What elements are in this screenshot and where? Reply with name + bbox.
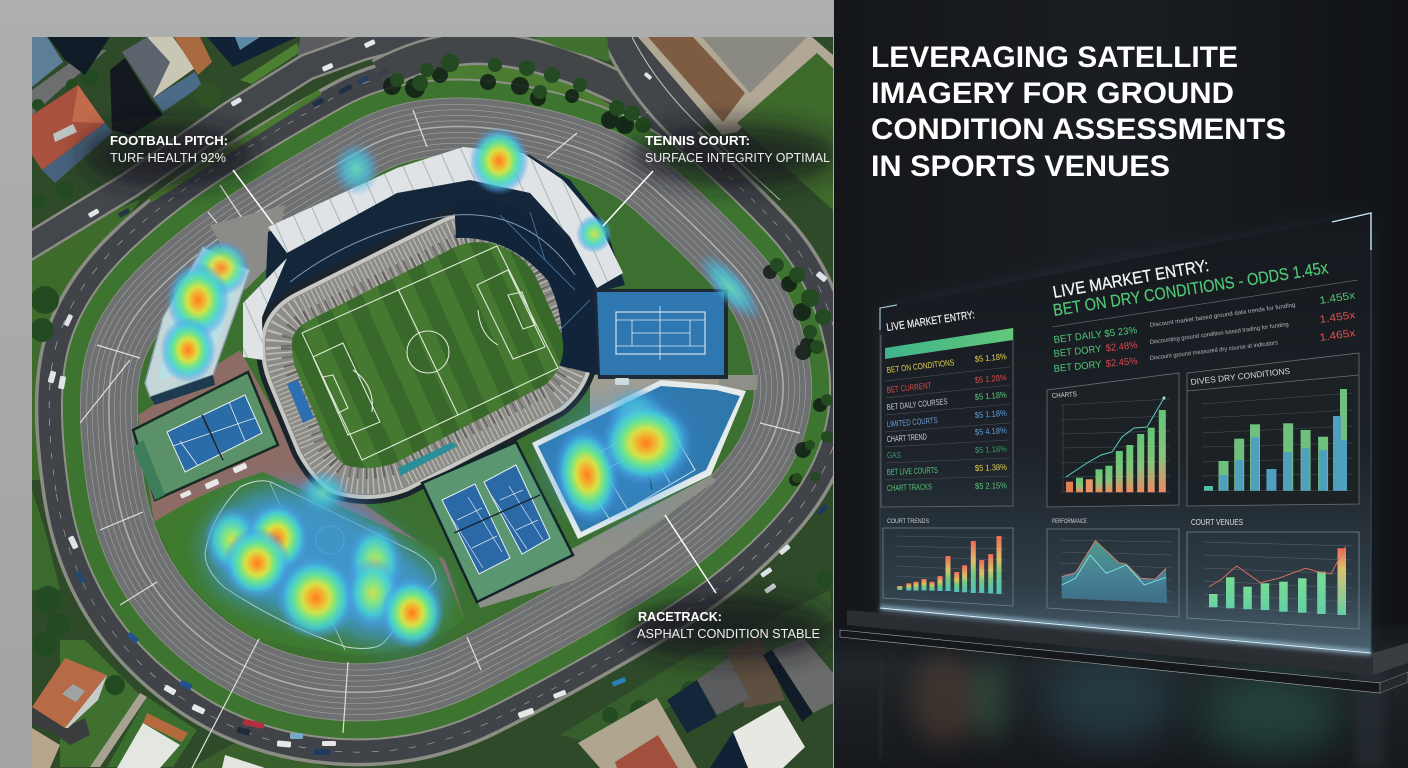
panel: live market entry headline: BET DORY bbox=[1053, 344, 1102, 360]
panel: market list: CHART TREND bbox=[886, 431, 927, 444]
panel: live market entry headline: 1.455x bbox=[1319, 289, 1357, 307]
heat map hot spots bbox=[160, 127, 771, 649]
panel: market list: $5 1.18% bbox=[975, 444, 1007, 455]
heat map: lower-left field wash bbox=[205, 488, 442, 643]
panel: market list: $5 1.18% bbox=[974, 389, 1007, 402]
center green double tennis courts bbox=[422, 442, 573, 602]
display stand base bbox=[840, 610, 1408, 693]
bar chart: charts bbox=[1047, 373, 1179, 507]
racetrack lanes bbox=[109, 126, 783, 692]
panel: market list: BET LIVE COURTS bbox=[887, 465, 938, 477]
panel: live market entry headline bbox=[1051, 256, 1358, 375]
vehicles bbox=[48, 39, 829, 755]
building with roof heat map bbox=[145, 247, 250, 405]
right page background bbox=[834, 0, 1408, 768]
panel: live market entry headline: LIVE MARKET ENTRY: bbox=[1051, 256, 1210, 302]
panel: market list: LIMITED COURTS bbox=[886, 415, 938, 429]
building: red roof bbox=[32, 85, 113, 183]
panel: market list: GAS bbox=[887, 450, 901, 460]
top-right dirt yard bbox=[638, 37, 833, 210]
panel: market list: BET DAILY COURSES bbox=[886, 396, 948, 412]
callout: football pitch bbox=[110, 133, 273, 224]
callout: racetrack bbox=[637, 515, 820, 641]
title: LEVERAGING SATELLITE bbox=[871, 41, 1238, 74]
title bbox=[871, 41, 1286, 183]
lower-right pool-shaped court bbox=[532, 380, 746, 539]
panel: market list: BET CURRENT bbox=[886, 380, 932, 395]
panel: market list: $5 2.15% bbox=[975, 480, 1007, 491]
callout: tennis court bbox=[603, 133, 830, 226]
panel: market list: BET ON CONDITIONS bbox=[886, 357, 955, 375]
panel: live market entry headline: BET DORY bbox=[1053, 359, 1102, 375]
callout: tennis court: TENNIS COURT: bbox=[645, 133, 750, 148]
panel: live market entry headline: BET DAILY $5 23% bbox=[1053, 325, 1138, 346]
surrounding ring road bbox=[109, 126, 783, 692]
panel: glass dashboard bbox=[880, 213, 1371, 653]
heat map: lower-right court wash bbox=[531, 381, 694, 530]
upper-right blue tennis court bbox=[594, 289, 728, 379]
title: IN SPORTS VENUES bbox=[871, 150, 1170, 183]
panel: market list: $5 1.18% bbox=[974, 408, 1007, 420]
callout: racetrack: ASPHALT CONDITION STABLE bbox=[637, 626, 820, 641]
bar and line chart: court venues: COURT VENUES bbox=[1191, 518, 1243, 527]
panel: live market entry headline: $2.48% bbox=[1105, 340, 1138, 354]
outside lawns bbox=[32, 37, 833, 768]
buildings: bottom-left bbox=[32, 658, 265, 768]
bar chart: dry conditions: DIVES DRY CONDITIONS bbox=[1190, 366, 1291, 387]
grass ring around track bbox=[109, 126, 783, 692]
title: IMAGERY FOR GROUND bbox=[871, 77, 1234, 110]
bar chart: court trends bbox=[883, 518, 1013, 606]
panel: market list: $5 4.18% bbox=[975, 425, 1007, 437]
bar chart: charts: CHARTS bbox=[1052, 391, 1077, 400]
panel: market list: LIVE MARKET ENTRY: bbox=[886, 309, 975, 334]
bar chart: dry conditions bbox=[1187, 353, 1359, 506]
football pitch bbox=[292, 242, 563, 468]
upper roads bbox=[20, 30, 780, 252]
left page background bbox=[0, 0, 834, 768]
area chart: performance bbox=[1047, 518, 1179, 617]
panel: live market entry headline: 1.465x bbox=[1319, 327, 1357, 344]
label scrim: football pitch bbox=[83, 123, 253, 187]
panel: live market entry headline: Discount market based ground data trends for funding bbox=[1149, 303, 1296, 329]
building: grey and cream roof bbox=[122, 37, 221, 112]
infield plaza bbox=[138, 350, 465, 620]
buildings: bottom-right bbox=[578, 637, 833, 768]
lower-left grass field bbox=[154, 472, 465, 655]
floor and reflections bbox=[834, 625, 1408, 768]
panel: aerial satellite view of sports venue bbox=[20, 30, 840, 768]
panel: market list: $5 1.18% bbox=[974, 351, 1007, 364]
panel: market list: $5 1.38% bbox=[975, 462, 1007, 473]
panel: live market entry headline: BET ON DRY CONDITIONS - ODDS 1.45x bbox=[1052, 258, 1330, 320]
inner grass infield bbox=[218, 200, 736, 616]
panel: market list: CHART TRACKS bbox=[887, 481, 932, 493]
panel: live market entry headline: Discounting ground condition based trading for funding bbox=[1149, 322, 1289, 346]
callout: football pitch: TURF HEALTH 92% bbox=[110, 150, 226, 165]
bar chart: court trends: COURT TRENDS bbox=[887, 518, 930, 525]
panel: live market entry headline: $2.45% bbox=[1105, 356, 1138, 370]
label scrim: racetrack bbox=[625, 596, 835, 660]
panel: live market entry headline: Discount ground measured dry course at indicators bbox=[1150, 340, 1278, 362]
callout: football pitch: FOOTBALL PITCH: bbox=[110, 133, 228, 148]
bar and line chart: court venues bbox=[1187, 518, 1359, 629]
trees and shadows bbox=[383, 67, 827, 486]
area chart: performance: PERFORMANCE bbox=[1052, 518, 1087, 525]
building: top-left blue bbox=[32, 37, 297, 135]
lawn north of road bbox=[533, 37, 610, 62]
callout: tennis court: SURFACE INTEGRITY OPTIMAL bbox=[645, 150, 830, 165]
stadium roof bbox=[268, 147, 623, 288]
track cross markings bbox=[80, 110, 800, 768]
left tennis court bbox=[133, 372, 278, 500]
panel: market list bbox=[881, 309, 1013, 507]
paved area west of roof building bbox=[210, 205, 285, 290]
advertising boards bbox=[287, 380, 314, 423]
stadium bbox=[243, 147, 625, 490]
callout: racetrack: RACETRACK: bbox=[638, 609, 722, 624]
title: CONDITION ASSESSMENTS bbox=[871, 113, 1286, 146]
panel: live market entry headline: 1.455x bbox=[1319, 309, 1357, 326]
label scrim: tennis court bbox=[630, 123, 840, 187]
panel: market list: $5 1.28% bbox=[974, 372, 1007, 385]
